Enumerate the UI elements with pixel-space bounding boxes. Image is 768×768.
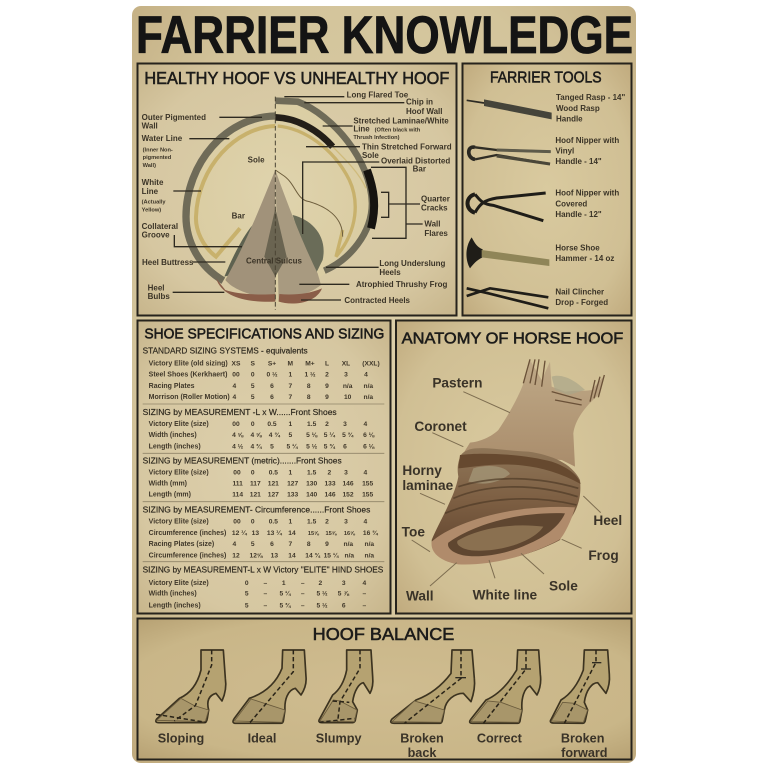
table: measurement front shoes: 4	[363, 421, 367, 428]
table: measurement front shoes: 6 ⅛	[363, 443, 375, 450]
table: metric front shoes: 146	[324, 492, 336, 499]
hoof: slumpy: Slumpy	[316, 731, 362, 745]
table: standard sizing systems: 4	[232, 383, 236, 390]
labels: left side: Wall)	[143, 163, 156, 169]
labels: right side: Long Underslung	[379, 259, 446, 268]
anatomy labels: Sole	[549, 579, 578, 594]
table: circumference front shoes: 3	[344, 518, 348, 525]
labels: right side: Sole	[362, 151, 379, 160]
table: hind shoes: 5 ⅞	[338, 591, 349, 598]
title: FARRIER KNOWLEDGE	[136, 6, 633, 65]
table: metric front shoes: Width (mm)	[149, 481, 187, 488]
labels: right side: Heels	[379, 268, 401, 277]
table: hind shoes: 5	[245, 591, 249, 598]
table: circumference front shoes: SIZING by MEASUREMENT- Circumference......Front Shoes	[143, 505, 370, 514]
table: measurement front shoes: 6 ⅛	[363, 432, 375, 439]
labels: right side: Line	[353, 124, 370, 133]
table: hind shoes: –	[263, 591, 267, 598]
table: hind shoes: 5 ¾	[279, 601, 291, 609]
table: measurement front shoes: 5	[288, 432, 292, 439]
table: standard sizing systems: XS	[232, 360, 241, 367]
table: measurement front shoes: 0.5	[267, 421, 277, 428]
table: hind shoes: Length (inches)	[149, 602, 201, 609]
table: circumference front shoes: 14	[288, 530, 296, 537]
table: hind shoes: 4	[362, 580, 366, 587]
table: circumference front shoes: 12 ¼	[232, 529, 247, 537]
illustration: hoof	[432, 359, 604, 564]
table: circumference front shoes: 7	[288, 541, 292, 548]
table: circumference front shoes: Circumference (inches)	[149, 530, 226, 537]
table: circumference front shoes: 13	[271, 552, 278, 559]
table: standard sizing systems: 10	[344, 394, 352, 401]
hoof: correct	[470, 650, 541, 745]
table: metric front shoes: 121	[250, 492, 261, 499]
labels: left side: Yellow)	[142, 207, 161, 213]
table: standard sizing systems: n/a	[364, 383, 373, 390]
table: circumference front shoes: Circumference (inches)	[149, 552, 226, 559]
table: circumference front shoes: 0	[251, 518, 255, 525]
hoof: correct: Correct	[477, 731, 523, 745]
table: standard sizing systems	[143, 346, 380, 401]
table: measurement front shoes: 4 ⅝	[232, 432, 244, 439]
labels: left side: Water Line	[142, 134, 183, 143]
tool: nail clincher: Nail Clincher	[555, 287, 604, 296]
anatomy labels: Wall	[406, 588, 434, 603]
table: hind shoes: –	[301, 580, 305, 587]
table: standard sizing systems: 00	[232, 372, 240, 379]
table: hind shoes	[143, 565, 383, 609]
table: metric front shoes: 0.5	[269, 469, 278, 476]
table: metric front shoes: 114	[232, 492, 243, 499]
table: metric front shoes: Victory Elite (size)	[149, 469, 209, 476]
table: circumference front shoes	[143, 505, 378, 559]
table: measurement front shoes: 5 ½	[306, 442, 318, 450]
hoof: sloping: Sloping	[158, 731, 204, 745]
table: standard sizing systems: M+	[305, 360, 315, 367]
table: metric front shoes: 4	[363, 469, 367, 476]
table: metric front shoes: 130	[306, 481, 318, 488]
table: hind shoes: –	[362, 602, 366, 609]
table: hind shoes: 1	[282, 580, 286, 587]
anatomy labels: laminae	[402, 478, 454, 493]
hoof: slumpy	[316, 650, 373, 745]
tool: tanged rasp: Wood Rasp	[556, 104, 600, 113]
table: measurement front shoes	[143, 408, 375, 450]
tool: hoof nipper with covered handle: Covered	[555, 199, 587, 208]
table: circumference front shoes: 13 ¼	[267, 529, 282, 537]
table: circumference front shoes: 8	[307, 541, 311, 548]
labels: right side: Bar	[413, 165, 426, 174]
table: measurement front shoes: 5 ⅛	[306, 432, 318, 439]
table: circumference front shoes: Victory Elite (size)	[149, 518, 209, 525]
table: standard sizing systems: 5	[251, 394, 255, 401]
labels: left side: Wall	[142, 122, 158, 131]
table: metric front shoes: 155	[362, 492, 374, 499]
table: metric front shoes: 133	[287, 492, 299, 499]
labels: left side: Central Sulcus	[246, 256, 302, 265]
panel: healthy hoof vs unhealthy hoof	[138, 64, 456, 316]
table: hind shoes: 5 ½	[316, 601, 328, 609]
labels: right side: Contracted Heels	[344, 296, 411, 305]
table: standard sizing systems: 4	[232, 394, 236, 401]
table: hind shoes: –	[362, 591, 366, 598]
table: standard sizing systems: M	[288, 360, 294, 367]
table: standard sizing systems: 6	[270, 383, 274, 390]
table: standard sizing systems: 1 ½	[304, 371, 316, 379]
table: measurement front shoes: 3	[343, 421, 347, 428]
labels: right side: (Often black with	[375, 127, 421, 133]
table: standard sizing systems: L	[325, 360, 329, 367]
labels: right side: Stretched Laminae/White	[353, 116, 449, 125]
anatomy labels: Horny	[402, 463, 442, 478]
table: circumference front shoes: 00	[233, 518, 241, 525]
table: standard sizing systems: S+	[268, 360, 276, 367]
labels: left side: Collateral	[142, 222, 178, 231]
hoof: broken back: Broken	[400, 731, 444, 745]
table: standard sizing systems: 4	[364, 372, 368, 379]
table: standard sizing systems: n/a	[364, 394, 373, 401]
table: circumference front shoes: n/a	[365, 552, 374, 559]
tool: nail clincher	[467, 287, 608, 308]
table: measurement front shoes: 5 ¼	[324, 431, 335, 439]
panel: farrier tools	[462, 64, 632, 316]
anatomy labels: Toe	[402, 525, 425, 540]
table: hind shoes: 6	[342, 602, 346, 609]
tool: horse shoe hammer: Hammer - 14 oz	[555, 254, 614, 263]
labels: left side	[142, 113, 302, 301]
hoof: broken forward: forward	[561, 746, 608, 760]
table: standard sizing systems: 9	[325, 394, 329, 401]
table: standard sizing systems: Morrison (Roller Motion)	[149, 394, 230, 401]
table: circumference front shoes: n/a	[365, 541, 374, 548]
table: hind shoes: SIZING by MEASUREMENT-L x W Victory "ELITE" HIND SHOES	[143, 565, 383, 574]
table: metric front shoes: 127	[268, 492, 279, 499]
table: metric front shoes: 121	[268, 481, 279, 488]
labels: right side: Hoof Wall	[406, 107, 443, 116]
table: circumference front shoes: 14 ¾	[305, 551, 321, 559]
tool: hoof nipper with covered handle: Hoof Nipper with	[555, 189, 619, 198]
table: standard sizing systems: 7	[288, 394, 292, 401]
hoof: broken back	[391, 650, 475, 760]
table: circumference front shoes: 1	[288, 518, 292, 525]
tool: hoof nipper with covered handle	[467, 189, 619, 221]
table: measurement front shoes: 5 ¼	[286, 442, 298, 450]
tool: tanged rasp: Tanged Rasp - 14"	[556, 93, 626, 102]
table: circumference front shoes: 5	[251, 541, 255, 548]
table: standard sizing systems: 7	[288, 383, 292, 390]
labels: left side: pigmented	[143, 155, 172, 161]
labels: left side: Groove	[142, 231, 170, 240]
table: standard sizing systems: n/a	[343, 383, 353, 390]
table: metric front shoes: 155	[362, 481, 374, 488]
table: hind shoes: –	[301, 591, 305, 598]
table: measurement front shoes: 5 ¾	[324, 442, 335, 450]
table: circumference front shoes: Racing Plates (size)	[149, 541, 214, 548]
table: circumference front shoes: 9	[325, 541, 329, 548]
table: measurement front shoes: Victory Elite (size)	[149, 421, 209, 428]
table: standard sizing systems: 0	[251, 372, 255, 379]
labels: left side: White	[142, 178, 164, 187]
table: measurement front shoes: Width (inches)	[149, 432, 197, 439]
labels: right side: Thrush Infection)	[353, 135, 400, 141]
heading: hoof balance: HOOF BALANCE	[313, 624, 454, 644]
leader lines	[173, 97, 423, 300]
anatomy labels: Frog	[588, 548, 619, 563]
table: circumference front shoes: 15⅝	[308, 531, 320, 537]
labels: right side: Wall	[424, 219, 440, 228]
labels: right side: Flares	[424, 229, 448, 238]
table: circumference front shoes: 6	[270, 541, 274, 548]
tool: horse shoe hammer: Horse Shoe	[555, 243, 600, 252]
table: hind shoes: 3	[342, 580, 346, 587]
labels: left side: Heel Buttress	[142, 258, 194, 267]
tool: hoof nipper with vinyl handle: Vinyl	[555, 146, 574, 155]
table: hind shoes: –	[263, 602, 267, 609]
labels: right side: Quarter	[421, 195, 450, 204]
table: circumference front shoes: 0.5	[269, 518, 278, 525]
labels: right side: Thin Stretched Forward	[362, 143, 452, 152]
labels: right side: Long Flared Toe	[347, 91, 409, 100]
table: hind shoes: Width (inches)	[149, 591, 197, 598]
labels: left side: Outer Pigmented	[142, 113, 206, 122]
table: measurement front shoes: 4 ⅝	[250, 432, 262, 439]
hoof: broken forward: Broken	[561, 731, 604, 745]
table: circumference front shoes: 2	[325, 518, 329, 525]
table: measurement front shoes: 1.5	[307, 421, 317, 428]
table: standard sizing systems: 6	[270, 394, 274, 401]
table: metric front shoes: 127	[287, 481, 299, 488]
table: circumference front shoes: 4	[363, 518, 367, 525]
table: standard sizing systems: Steel Shoes (Kerkhaert)	[149, 372, 227, 379]
table: measurement front shoes: 0	[251, 421, 255, 428]
labels: left side: Sole	[248, 156, 265, 165]
table: measurement front shoes: SIZING by MEASUREMENT -L x W......Front Shoes	[143, 408, 337, 417]
table: hind shoes: 5 ½	[316, 590, 328, 598]
heading: farrier tools: FARRIER TOOLS	[490, 70, 602, 87]
diagram: hoof cross-section	[186, 97, 374, 310]
labels: left side: Bar	[232, 211, 245, 220]
table: hind shoes: 0	[245, 580, 249, 587]
table: standard sizing systems: 0 ½	[266, 371, 278, 379]
table: measurement front shoes: 1	[288, 421, 292, 428]
table: measurement front shoes: 2	[325, 421, 329, 428]
anatomy labels: Pastern	[432, 376, 482, 391]
table: metric front shoes: 133	[324, 481, 336, 488]
labels: left side: Line	[142, 187, 159, 196]
hoof: broken back: back	[408, 746, 437, 760]
tool: hoof nipper with covered handle: Handle - 12"	[555, 210, 602, 219]
table: measurement front shoes: 5 ¾	[342, 431, 354, 439]
table: circumference front shoes: n/a	[344, 541, 353, 548]
table: circumference front shoes: n/a	[345, 552, 354, 559]
tool: tanged rasp	[467, 93, 626, 124]
table: measurement front shoes: 6	[343, 443, 347, 450]
panel: anatomy of horse hoof	[396, 320, 632, 614]
table: hind shoes: 2	[318, 580, 322, 587]
table: standard sizing systems: 2	[325, 372, 329, 379]
table: measurement front shoes: 5	[270, 443, 274, 450]
labels: right side: Chip in	[406, 98, 433, 107]
table: circumference front shoes: 16 ¾	[363, 529, 378, 537]
table: standard sizing systems: 8	[307, 383, 311, 390]
table: standard sizing systems: S	[250, 360, 255, 367]
anatomy labels: White line	[473, 588, 538, 603]
table: metric front shoes: 117	[250, 481, 261, 488]
table: hind shoes: 5	[245, 602, 249, 609]
table: measurement front shoes: 00	[232, 421, 240, 428]
table: circumference front shoes: 12⅝	[250, 552, 263, 559]
anatomy leader lines	[412, 392, 601, 586]
table: metric front shoes: 1	[288, 469, 292, 476]
hoof: ideal	[233, 650, 306, 745]
table: standard sizing systems: 5	[251, 383, 255, 390]
labels: right side: Atrophied Thrushy Frog	[356, 280, 447, 289]
table: standard sizing systems: Racing Plates	[149, 383, 195, 390]
labels: left side: (Inner Non-	[143, 147, 173, 153]
table: measurement front shoes: 4 ¾	[250, 442, 262, 450]
table: metric front shoes	[143, 456, 374, 499]
table: hind shoes: Victory Elite (size)	[149, 580, 209, 587]
tool: tanged rasp: Handle	[556, 115, 583, 124]
labels: right side: Cracks	[421, 204, 448, 213]
table: metric front shoes: 2	[327, 469, 331, 476]
panel: hoof balance	[138, 618, 632, 760]
tool: hoof nipper with vinyl handle: Hoof Nipper with	[555, 136, 619, 145]
table: metric front shoes: 1.5	[307, 469, 317, 476]
labels: left side: Heel	[148, 284, 165, 293]
panel: shoe specifications and sizing	[138, 320, 390, 614]
tool: hoof nipper with vinyl handle	[469, 136, 619, 166]
table: metric front shoes: 140	[306, 492, 318, 499]
tool: nail clincher: Drop - Forged	[555, 298, 608, 307]
table: circumference front shoes: 1.5	[307, 518, 317, 525]
table: measurement front shoes: 4 ½	[232, 442, 244, 450]
labels: left side: (Actually	[142, 200, 166, 206]
table: measurement front shoes: 4 ¾	[269, 431, 280, 439]
table: metric front shoes: 152	[342, 492, 354, 499]
table: hind shoes: –	[301, 602, 305, 609]
table: circumference front shoes: 4	[232, 541, 236, 548]
hoof: broken forward	[550, 650, 609, 760]
table: metric front shoes: Length (mm)	[149, 492, 191, 499]
table: metric front shoes: 146	[342, 481, 354, 488]
table: metric front shoes: 3	[344, 469, 348, 476]
table: standard sizing systems: STANDARD SIZING SYSTEMS - equivalents	[143, 346, 308, 355]
labels: left side: Bulbs	[148, 292, 170, 301]
anatomy labels: Heel	[593, 513, 622, 528]
table: hind shoes: 5 ¼	[279, 590, 291, 598]
anatomy labels	[402, 376, 622, 603]
table: circumference front shoes: 12	[232, 552, 240, 559]
table: circumference front shoes: 14	[288, 552, 296, 559]
background sign plate	[132, 6, 636, 763]
table: metric front shoes: 00	[233, 469, 241, 476]
table: metric front shoes: 0	[251, 469, 255, 476]
table: standard sizing systems: 3	[344, 372, 348, 379]
table: standard sizing systems: 9	[325, 383, 329, 390]
heading: healthy hoof: HEALTHY HOOF VS UNHEALTHY HOOF	[144, 68, 449, 88]
table: standard sizing systems: XL	[342, 360, 350, 367]
table: circumference front shoes: 16⅝	[344, 531, 356, 537]
table: metric front shoes: SIZING by MEASUREMENT (metric).......Front Shoes	[143, 456, 342, 465]
labels: right side: Overlaid Distorted	[381, 156, 450, 165]
table: measurement front shoes: Length (inches)	[149, 443, 201, 450]
heading: anatomy: ANATOMY OF HORSE HOOF	[402, 330, 623, 347]
anatomy labels: Coronet	[414, 419, 467, 434]
table: standard sizing systems: 8	[307, 394, 311, 401]
hoof: sloping	[156, 650, 226, 745]
table: metric front shoes: 111	[232, 481, 243, 488]
table: circumference front shoes: 13	[252, 530, 259, 537]
tool: hoof nipper with vinyl handle: Handle - 14"	[555, 157, 602, 166]
tool: horse shoe hammer	[466, 237, 614, 268]
table: hind shoes: –	[263, 580, 267, 587]
table: standard sizing systems: 1	[288, 372, 292, 379]
table: circumference front shoes: 15⅝	[325, 531, 338, 537]
heading: shoe specifications: SHOE SPECIFICATIONS AND SIZING	[144, 326, 384, 342]
table: standard sizing systems: (XXL)	[362, 360, 380, 367]
table: standard sizing systems: Victory Elite (old sizing)	[149, 360, 228, 367]
table: circumference front shoes: 15 ¼	[324, 551, 339, 559]
hoof: ideal: Ideal	[248, 731, 276, 745]
labels: right side	[344, 91, 452, 305]
